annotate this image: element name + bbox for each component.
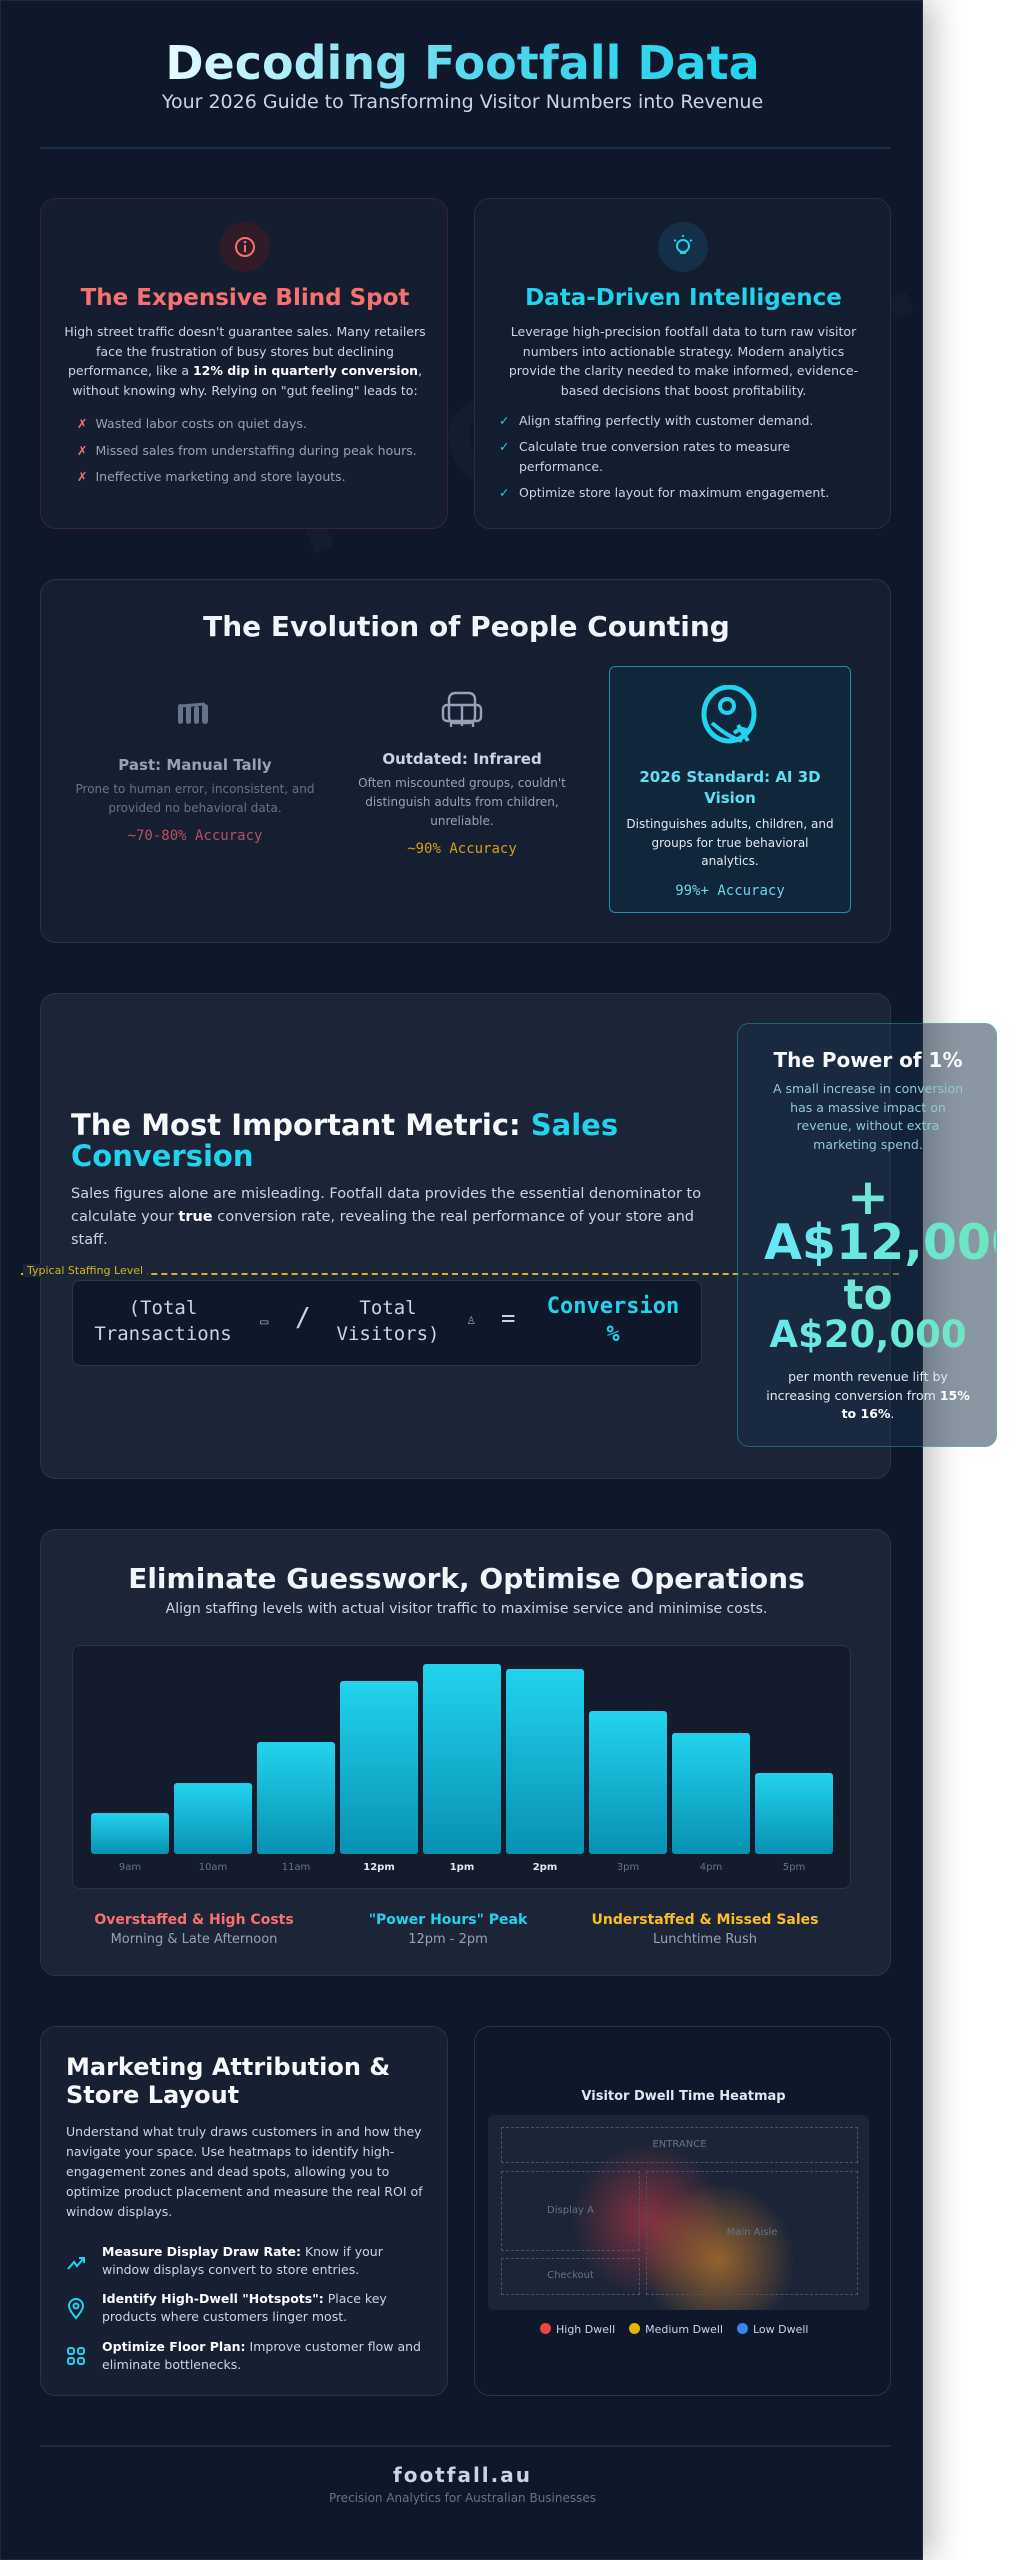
text: High street traffic doesn't guarantee sales. Many retailers face the frustration of busy stores but declining performance, like a 12% dip in quarterly conversion, without knowing why. Relying on "gut feeling" leads to: <box>64 324 426 398</box>
footer tagline: Precision Analytics for Australian Businesses <box>329 2491 596 2505</box>
bar chart: 5pm <box>783 1862 805 1873</box>
callout: power of 1%: The Power of 1% <box>773 1048 963 1072</box>
formula box: Total Visitors) <box>337 1297 439 1345</box>
column: AI 3D vision <box>609 666 851 913</box>
formula box: ▭ <box>260 1314 268 1330</box>
column: infrared: ~90% Accuracy <box>407 841 517 857</box>
heading: The Evolution of People Counting <box>203 610 730 643</box>
bar chart: 12pm <box>363 1862 395 1873</box>
callout: power of 1%: A small increase in conversion has a massive impact on revenue, without extra marketing spend. <box>773 1081 963 1152</box>
panel: intelligence <box>474 198 891 529</box>
list: ✓ <box>499 413 509 428</box>
list: ✗ Missed sales from understaffing during peak hours. <box>77 442 417 458</box>
panel: sales conversion <box>40 993 891 1479</box>
formula box <box>72 1280 702 1366</box>
list <box>499 413 829 500</box>
staffing level line <box>21 1273 899 1275</box>
bar chart: 11am <box>282 1862 310 1873</box>
callout: power of 1%: + <box>847 1168 889 1226</box>
heading: Eliminate Guesswork, Optimise Operations <box>128 1562 805 1595</box>
heatmap legend: Low Dwell <box>753 2323 808 2336</box>
column: manual: Prone to human error, inconsistent, and provided no behavioral data. <box>76 782 314 815</box>
list: ✓ <box>499 485 509 500</box>
legend: power hours <box>369 1912 528 1947</box>
formula box: = <box>501 1304 515 1332</box>
column: AI 3D vision: 2026 Standard: AI 3D Vision <box>639 768 821 807</box>
heatmap: Main Aisle <box>727 2227 777 2238</box>
panel: marketing attribution <box>40 2026 448 2396</box>
callout: power of 1%: to <box>844 1270 892 1319</box>
bar chart: 1pm <box>450 1862 474 1873</box>
icon: AI vision <box>702 685 756 744</box>
heatmap: Display A <box>547 2205 594 2216</box>
item: floor plan: Optimize Floor Plan: Improve customer flow and eliminate bottlenecks. <box>102 2339 421 2372</box>
list: Align staffing perfectly with customer demand. <box>519 413 813 428</box>
column: AI 3D vision: Distinguishes adults, children, and groups for true behavioral analytics. <box>626 817 834 868</box>
column: manual: Past: Manual Tally <box>118 756 272 774</box>
panel: blind spot <box>40 198 448 529</box>
text: Understand what truly draws customers in and how they navigate your space. Use heatmaps to identify high-engagement zones and dead spots, allowing you to optimize product placement and measure the real ROI of window displays. <box>66 2124 423 2219</box>
legend: overstaffed: Overstaffed & High Costs <box>94 1912 294 1928</box>
bar chart: 4pm <box>700 1862 722 1873</box>
icon: info <box>220 222 270 272</box>
heading: Marketing Attribution & Store Layout <box>66 2053 390 2109</box>
item: draw rate: Measure Display Draw Rate: Know if your window displays convert to store entries. <box>102 2244 383 2277</box>
legend: overstaffed <box>94 1912 294 1947</box>
column: infrared <box>358 692 566 857</box>
list: Optimize store layout for maximum engagement. <box>519 485 829 500</box>
icon: tally <box>178 702 208 724</box>
bar chart: 3pm <box>617 1862 639 1873</box>
list: ✗ Ineffective marketing and store layouts. <box>77 469 346 484</box>
legend: understaffed <box>592 1912 818 1947</box>
column: AI 3D vision: 99%+ Accuracy <box>675 882 785 898</box>
heatmap legend: Medium Dwell <box>645 2323 723 2336</box>
legend: power hours: 12pm - 2pm <box>408 1932 488 1947</box>
text: Leverage high-precision footfall data to turn raw visitor numbers into actionable strategy. Modern analytics provide the clarity needed to make informed, evidence-based decisions that boost profitability. <box>509 324 858 398</box>
title: Decoding Footfall Data <box>165 36 760 90</box>
callout: power of 1%: A$20,000 <box>769 1313 967 1356</box>
list: ✓ <box>499 439 509 454</box>
icon: sensor <box>442 692 482 727</box>
heatmap <box>488 2115 869 2310</box>
legend: understaffed: Lunchtime Rush <box>653 1932 757 1947</box>
callout: power of 1% <box>737 1023 997 1447</box>
column: infrared: Outdated: Infrared <box>382 750 542 768</box>
heading: Data-Driven Intelligence <box>525 285 842 311</box>
heatmap: Checkout <box>547 2270 594 2281</box>
subtitle: Your 2026 Guide to Transforming Visitor Numbers into Revenue <box>162 91 763 113</box>
heatmap: ENTRANCE <box>652 2139 707 2150</box>
legend: power hours: "Power Hours" Peak <box>369 1912 527 1928</box>
heading: The Expensive Blind Spot <box>81 285 409 311</box>
legend: understaffed: Understaffed & Missed Sales <box>592 1912 818 1928</box>
panel: evolution <box>40 579 891 943</box>
heading: The Most Important Metric: Sales Conversion <box>71 1108 618 1173</box>
list: Calculate true conversion rates to measure performance. <box>519 439 790 474</box>
bar chart: 10am <box>199 1862 227 1873</box>
subheading: Align staffing levels with actual visitor traffic to maximise service and minimise costs. <box>166 1601 767 1617</box>
formula box: (Total Transactions <box>94 1297 232 1345</box>
panel: heatmap <box>474 2026 891 2396</box>
column: infrared: Often miscounted groups, couldn't distinguish adults from children, unreliable. <box>358 776 566 828</box>
footer brand: footfall.au <box>393 2463 532 2487</box>
heading: Visitor Dwell Time Heatmap <box>581 2089 786 2104</box>
icon: bulb <box>658 222 708 272</box>
bar chart: 9am <box>119 1862 141 1873</box>
column: manual <box>76 702 314 844</box>
heatmap legend <box>540 2323 808 2336</box>
list: ✗ Wasted labor costs on quiet days. <box>77 416 307 431</box>
legend: overstaffed: Morning & Late Afternoon <box>111 1932 277 1947</box>
bar chart: 2pm <box>533 1862 557 1873</box>
text: Sales figures alone are misleading. Footfall data provides the essential denominator to calculate your true conversion rate, revealing the real performance of your store and staff. <box>71 1186 701 1248</box>
heatmap legend: High Dwell <box>556 2323 615 2336</box>
formula box: ♙ <box>467 1312 475 1328</box>
formula box: / <box>295 1303 311 1333</box>
formula box: % <box>606 1322 620 1347</box>
column: manual: ~70-80% Accuracy <box>128 828 262 844</box>
formula box: Conversion <box>547 1294 679 1319</box>
callout: power of 1%: per month revenue lift by increasing conversion from 15% to 16%. <box>766 1369 970 1421</box>
staffing label: Typical Staffing Level <box>27 1264 143 1277</box>
panel: operations <box>40 1529 891 1976</box>
item: hotspots: Identify High-Dwell "Hotspots": Place key products where customers linger most. <box>102 2291 387 2324</box>
list <box>77 416 417 484</box>
bar chart <box>72 1645 851 1889</box>
